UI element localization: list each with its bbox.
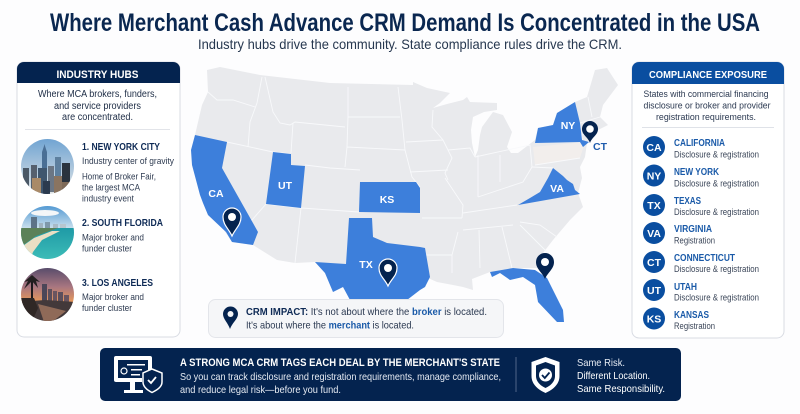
pin: Texas [379,259,397,286]
map: Virginia: VA [550,183,564,195]
hub: South Florida: Major broker and [82,232,144,244]
state: New York: NY [647,170,661,182]
map: New York: NY [561,120,575,132]
map: California: CA [208,188,224,200]
callout: CRM impact [208,300,504,338]
hub: New York City: the largest MCA [82,182,141,194]
state: Kansas: KS [647,314,661,326]
panel: industry hubs [17,62,180,337]
compliance intro text: States with commercial financing [644,89,768,100]
photo: Los Angeles sunset [20,267,76,322]
state: California: Disclosure & registration [674,150,759,160]
state: California: CA [646,142,662,154]
callout text: It's about where the merchant is located. [246,320,414,332]
hub: Los Angeles [82,277,153,314]
banner slogan: Same Responsibility. [577,383,665,395]
banner text: A STRONG MCA CRM TAGS EACH DEAL BY THE MERCHANT'S STATE [180,357,500,369]
hub: New York City: industry event [82,194,134,204]
state: California [643,136,759,160]
map: Texas [315,218,430,300]
icon: shield check [532,357,560,393]
banner: strong MCA CRM [100,348,681,401]
hubs header: INDUSTRY HUBS [56,69,138,81]
pin: Los Angeles [223,208,241,236]
state: New York [643,164,759,188]
compliance header [632,62,784,84]
state: Texas [643,194,759,217]
hubs intro text: and service providers [54,101,141,112]
hubs intro text: Where MCA brokers, funders, [38,89,157,100]
hub: Los Angeles: funder cluster [82,303,132,314]
hubs intro text: are concentrated. [62,112,133,123]
state: New York: NEW YORK [674,167,720,178]
banner text [180,357,501,396]
banner text: and reduce legal risk—before you fund. [180,384,341,396]
map: New York [535,102,589,147]
US map [191,67,618,322]
hub: New York City: Home of Broker Fair, [82,172,156,182]
state: Utah: UT [647,285,662,297]
hub: New York City [82,141,174,204]
state: Kansas: KANSAS [674,310,709,321]
photo: New York City skyline [21,139,74,194]
map: base land [192,67,618,298]
state: Kansas: Registration [674,321,715,331]
compliance intro text [644,89,770,123]
banner slogan: Different Location. [577,370,650,382]
map: state borders [208,77,600,273]
hub: New York City: Industry center of gravity [82,156,174,167]
hub: New York City: 1. NEW YORK CITY [82,141,160,153]
map: Utah: UT [278,180,293,192]
map: Texas: TX [359,259,373,271]
state: Texas: TEXAS [674,196,701,207]
compliance intro text: disclosure or broker and provider [644,100,770,112]
label: CT: CT [593,141,608,153]
banner slogan [577,357,665,395]
callout text [246,306,487,332]
map: Florida [490,268,564,322]
hubs intro text [38,89,157,123]
banner text: So you can track disclosure and registration requirements, manage compliance, [180,371,501,383]
state: Connecticut: Disclosure & registration [674,264,759,274]
pin: Florida [536,253,554,279]
hub: Los Angeles: 3. LOS ANGELES [82,277,153,289]
icon: monitor with shield [114,356,162,393]
state: Connecticut [643,251,759,274]
panel: compliance exposure [632,62,784,338]
map: Virginia [518,168,580,205]
state: New York: Disclosure & registration [674,178,759,188]
hub: South Florida [82,217,163,254]
state: Connecticut: CONNECTICUT [674,253,735,264]
photo: South Florida beach [20,205,76,260]
state: Virginia: VIRGINIA [674,224,712,235]
state: Virginia: VA [647,228,661,240]
state: Virginia [643,222,715,246]
hubs header [17,62,180,83]
state: Texas: TX [647,200,661,212]
state: Virginia: Registration [674,236,715,246]
pin: Connecticut [582,121,598,143]
state: Utah [643,279,759,302]
state: Kansas [643,308,715,331]
state: California: CALIFORNIA [674,138,725,149]
subtitle: Industry hubs drive the community. State compliance rules drive the CRM. [198,36,622,52]
compliance intro text: registration requirements. [656,112,756,123]
state: Utah: Disclosure & registration [674,292,759,302]
state: Utah: UTAH [674,282,697,293]
map: Pennsylvania tint [533,142,585,165]
hub: South Florida: funder cluster [82,244,132,254]
icon: location pin [223,306,238,329]
hub: South Florida: 2. SOUTH FLORIDA [82,217,163,229]
banner slogan: Same Risk. [577,357,625,369]
state: Connecticut: CT [647,257,662,269]
hub: Los Angeles: Major broker and [82,292,144,303]
callout text: CRM IMPACT: It's not about where the broker is located. [246,306,487,318]
map: Utah [266,152,305,208]
map: Kansas [359,182,420,213]
map: Kansas: KS [380,194,394,206]
compliance header: COMPLIANCE EXPOSURE [649,69,767,81]
map: California [191,135,258,245]
state: Texas: Disclosure & registration [674,207,759,217]
